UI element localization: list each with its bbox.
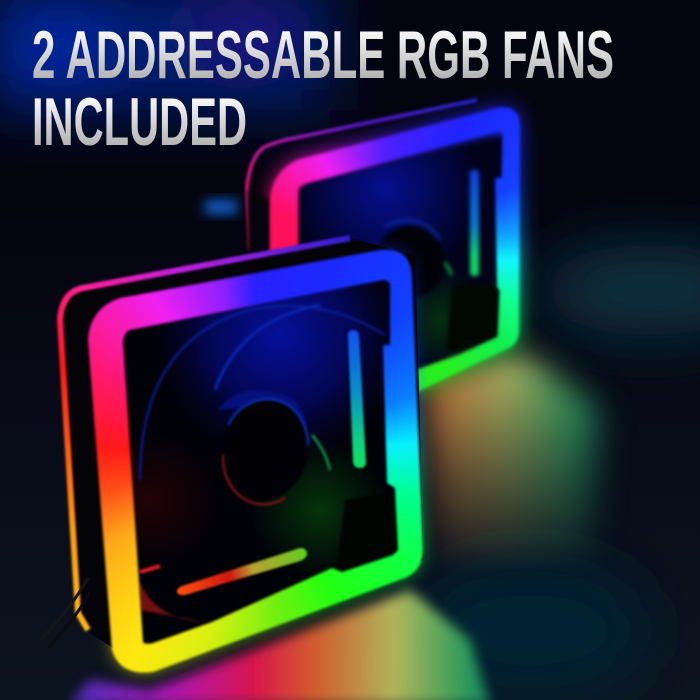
- back fan lit ring: [267, 105, 522, 394]
- back fan: [243, 92, 536, 403]
- front fan interior blades: [132, 282, 390, 623]
- title: INCLUDED: [32, 84, 247, 160]
- front fan: [40, 234, 434, 683]
- front fan glow: [100, 238, 434, 683]
- front fan lit ring: [86, 248, 425, 674]
- back fan glow: [256, 92, 536, 403]
